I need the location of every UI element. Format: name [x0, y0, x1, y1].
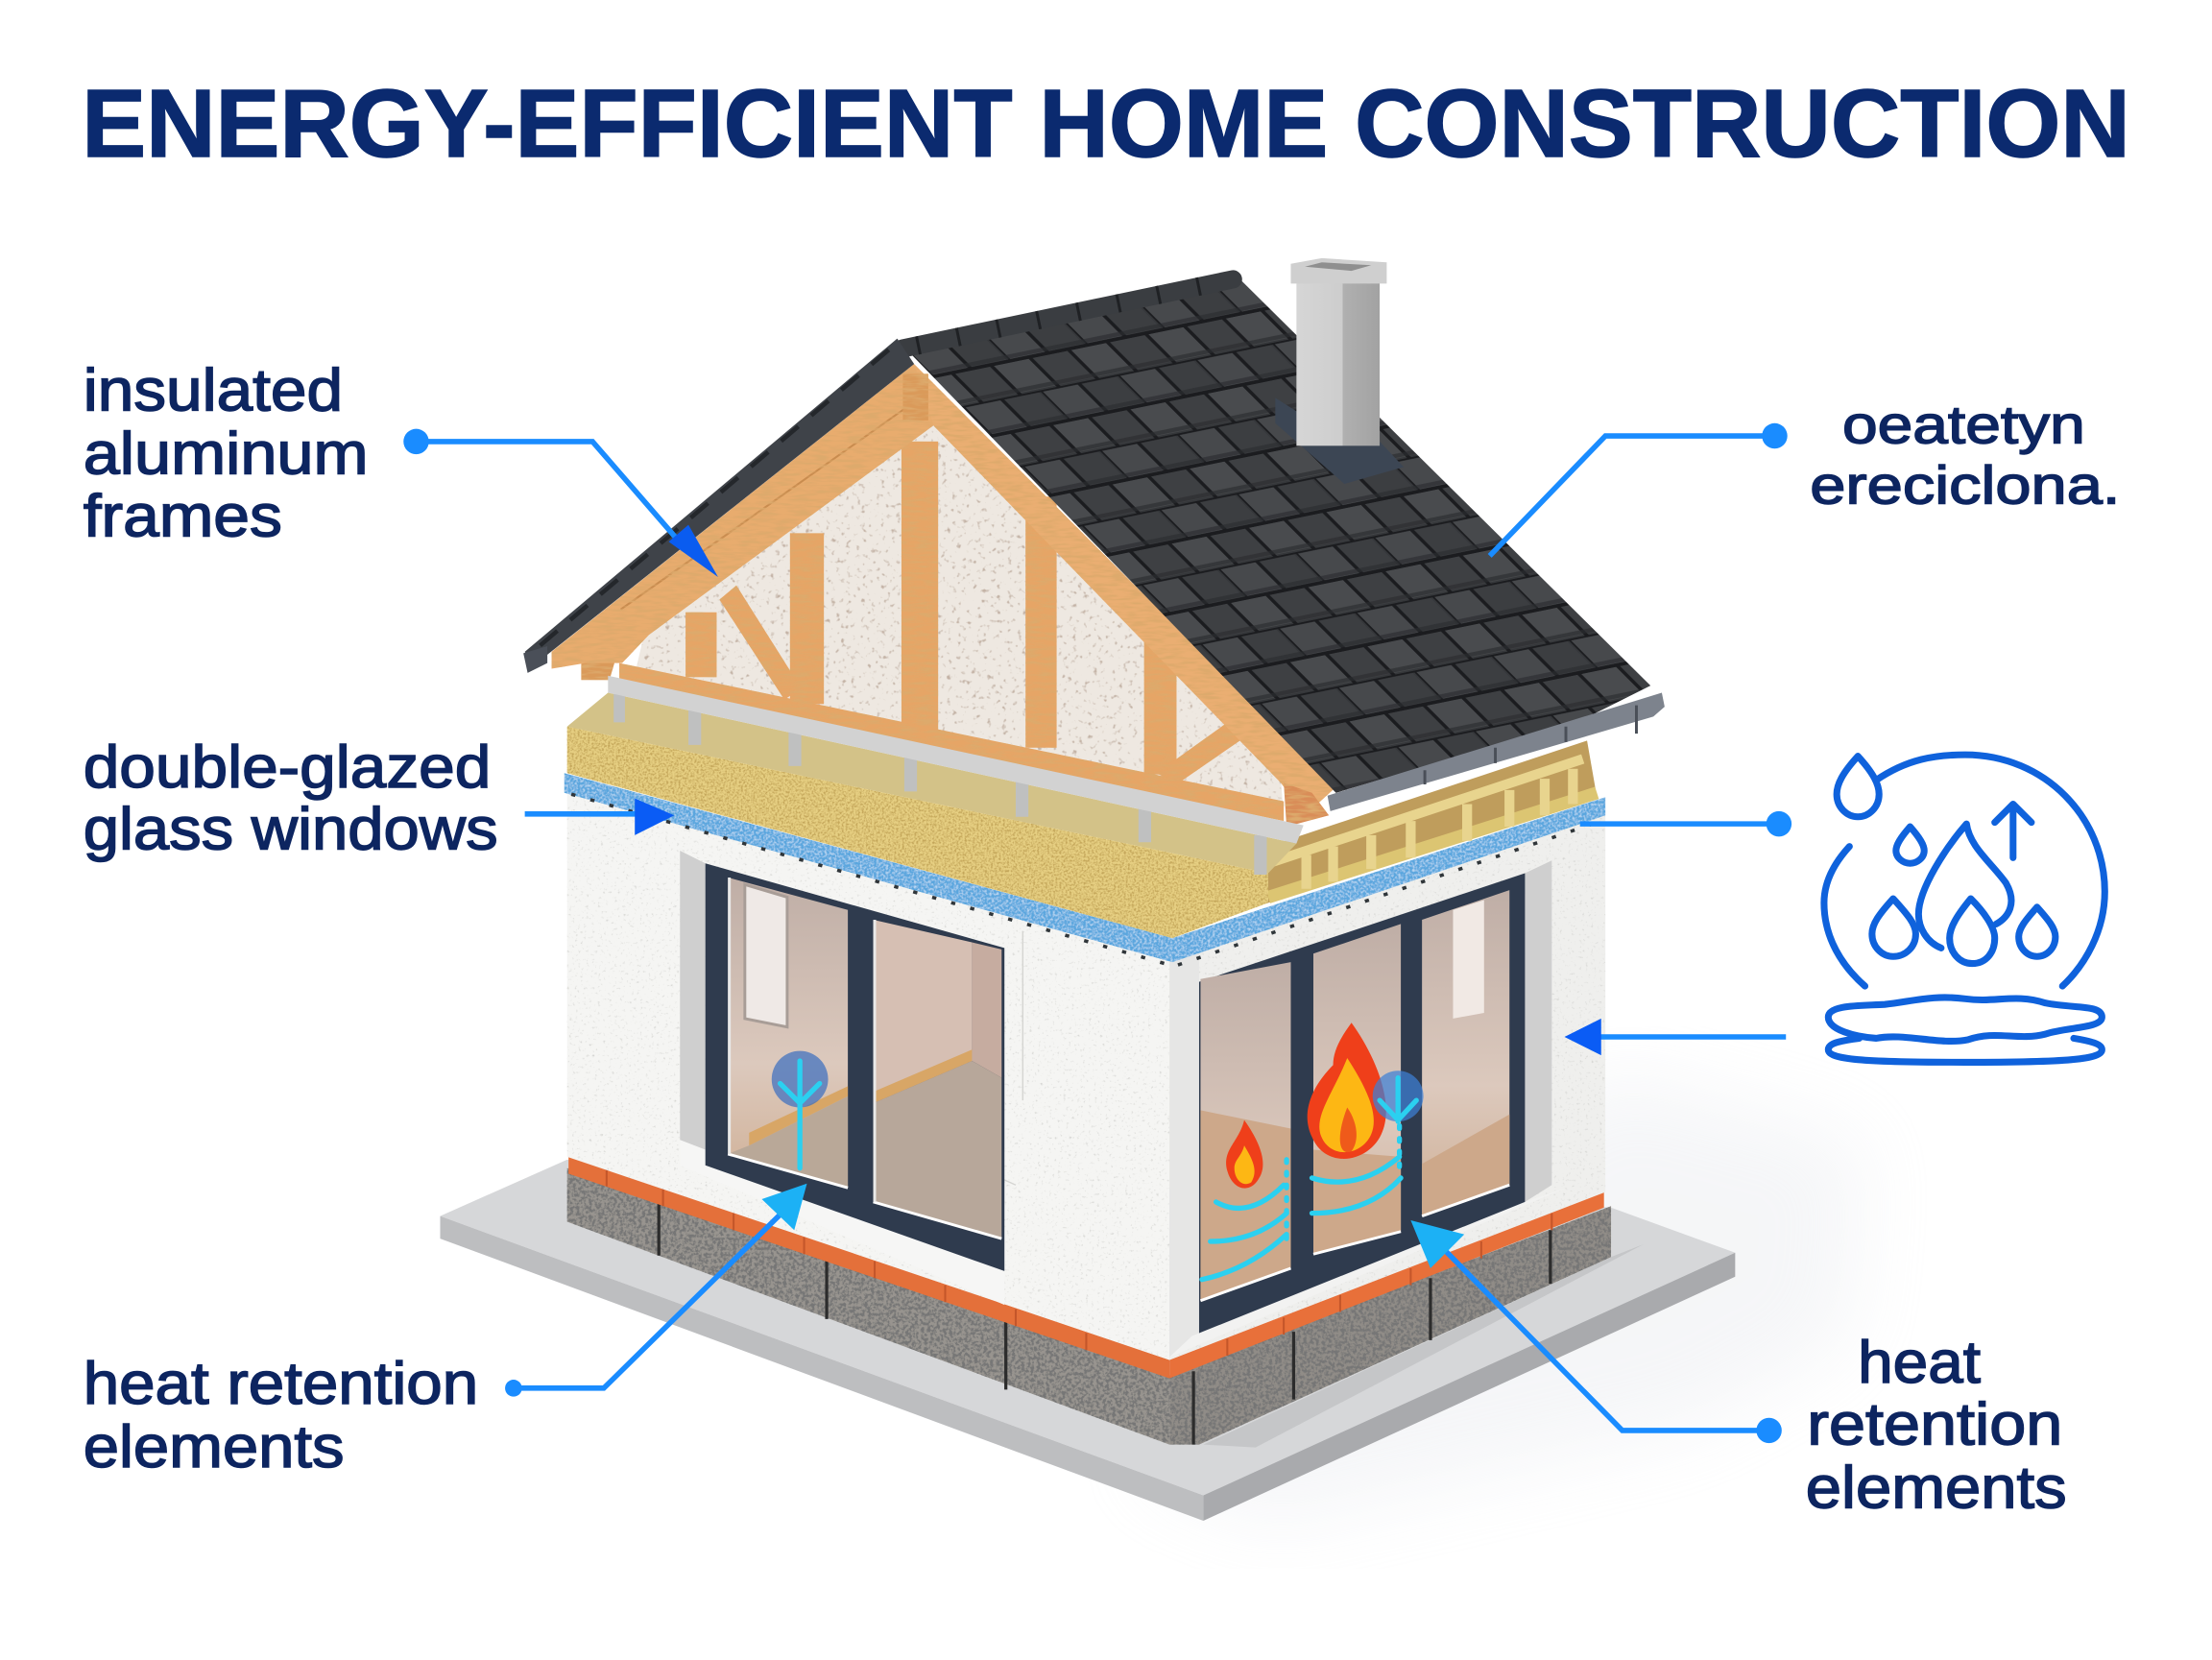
- floor shadow: [1129, 1072, 1863, 1524]
- gutter: [1328, 692, 1665, 811]
- icon: flames in window: [1226, 1022, 1386, 1189]
- icon: cold air markers and heat waves: [772, 1051, 1424, 1280]
- gable insulation panel: [635, 423, 1284, 818]
- label: heat retention elements left: elements: [84, 1414, 345, 1480]
- label: garbled upper right text: ereciclona.: [1810, 455, 2120, 516]
- label: garbled upper right text: oeatetyn: [1842, 394, 2085, 454]
- left roof edge: [523, 339, 914, 673]
- left window: [680, 851, 1004, 1305]
- label: insulated aluminum frames: insulated: [84, 358, 343, 424]
- chimney: [1275, 258, 1404, 484]
- icon: moisture and heat droplets: [1824, 755, 2104, 1062]
- roof shingles: [902, 276, 1650, 793]
- label: insulated aluminum frames: frames: [84, 483, 282, 549]
- orange thermal break: [568, 1157, 1604, 1379]
- foundation blocks: [567, 1168, 1611, 1445]
- label: double-glazed glass windows: [84, 734, 498, 863]
- arrow: roof shingles callout: [1490, 423, 1788, 556]
- wooden joists: [1268, 740, 1597, 902]
- label: heat retention elements right: heat: [1858, 1330, 1981, 1396]
- label: heat retention elements left: heat retention: [84, 1351, 478, 1417]
- label: heat retention elements right: retention: [1807, 1392, 2062, 1458]
- arrow: connector to icon top: [1580, 811, 1791, 836]
- label: heat retention elements right: elements: [1806, 1456, 2067, 1522]
- arrow: heat retention left: [505, 1184, 806, 1397]
- label: garbled upper right text: [1810, 394, 2120, 516]
- label: insulated aluminum frames: [84, 358, 369, 549]
- label: double-glazed glass windows: glass windows: [84, 797, 498, 863]
- arrow: double-glazed glass windows: [525, 799, 674, 835]
- right wall: [1169, 811, 1605, 1359]
- arrow: insulated aluminum frames: [403, 429, 718, 577]
- timber frame: [552, 364, 1336, 827]
- arrow: connector to icon bottom: [1565, 1019, 1786, 1055]
- label: insulated aluminum frames: aluminum: [84, 421, 369, 488]
- label: double-glazed glass windows: double-glazed: [84, 734, 491, 801]
- grey beam and legs: [608, 676, 1304, 875]
- left wall: [567, 782, 1169, 1359]
- roof ridge cap: [902, 279, 1233, 349]
- house cutaway illustration: [440, 258, 1735, 1521]
- mineral wool insulation layer: [567, 692, 1296, 938]
- arrow: heat retention right: [1410, 1220, 1782, 1443]
- label: heat retention elements left: [84, 1351, 478, 1480]
- title: ENERGY-EFFICIENT HOME CONSTRUCTION: [82, 71, 2130, 178]
- concrete base plate: [440, 1160, 1735, 1521]
- right window: [1169, 860, 1566, 1358]
- blue exterior insulation: [565, 773, 1605, 965]
- label: heat retention elements right: [1806, 1330, 2067, 1522]
